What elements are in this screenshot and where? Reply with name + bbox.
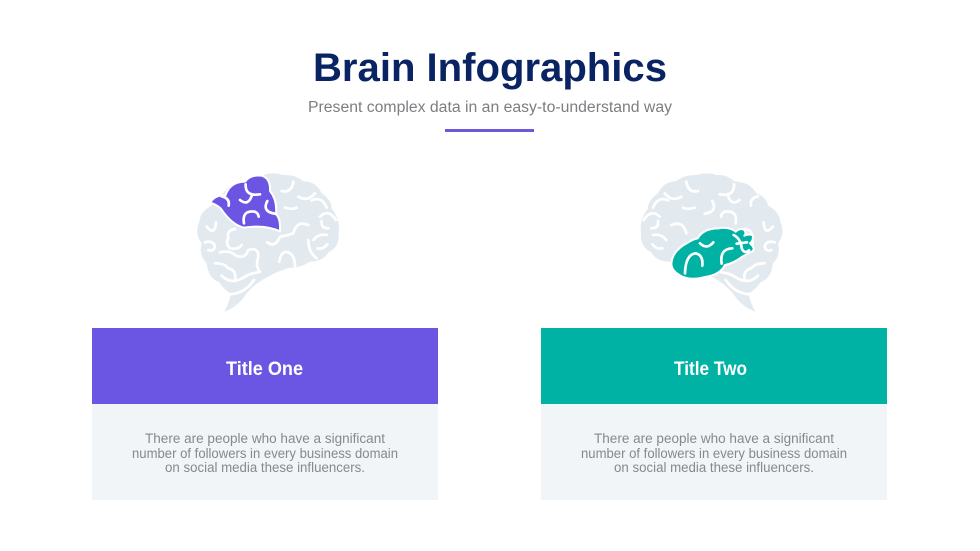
brain silhouette — [197, 173, 339, 312]
panel body background — [541, 404, 887, 500]
body text: title two — [581, 431, 847, 475]
heading: title two: Title Two — [674, 359, 747, 380]
body text: title one: on social media these influencers. — [165, 460, 365, 475]
teal highlighted lobe — [671, 228, 754, 279]
subtitle: Present complex data in an easy-to-understand way — [308, 99, 672, 116]
panel body background — [92, 404, 438, 500]
panel header: title one — [92, 328, 438, 404]
body text: title two: number of followers in every business domain — [581, 446, 847, 461]
icon: brain with purple frontal lobe — [197, 173, 339, 312]
title: Brain Infographics — [313, 46, 667, 90]
panel: title two — [541, 328, 887, 500]
title underline accent — [445, 129, 534, 132]
body text: title one: number of followers in every business domain — [132, 446, 398, 461]
body text: title one — [132, 431, 398, 475]
body text: title two: on social media these influencers. — [614, 460, 814, 475]
brain silhouette — [641, 173, 783, 312]
body text: title one: There are people who have a significant — [145, 431, 385, 446]
heading: title one: Title One — [226, 359, 303, 380]
body text: title two: There are people who have a significant — [594, 431, 834, 446]
icon: brain with teal temporal lobe — [641, 173, 783, 312]
purple highlighted lobe — [210, 175, 280, 231]
panel: title one — [92, 328, 438, 500]
panel header: title two — [541, 328, 887, 404]
